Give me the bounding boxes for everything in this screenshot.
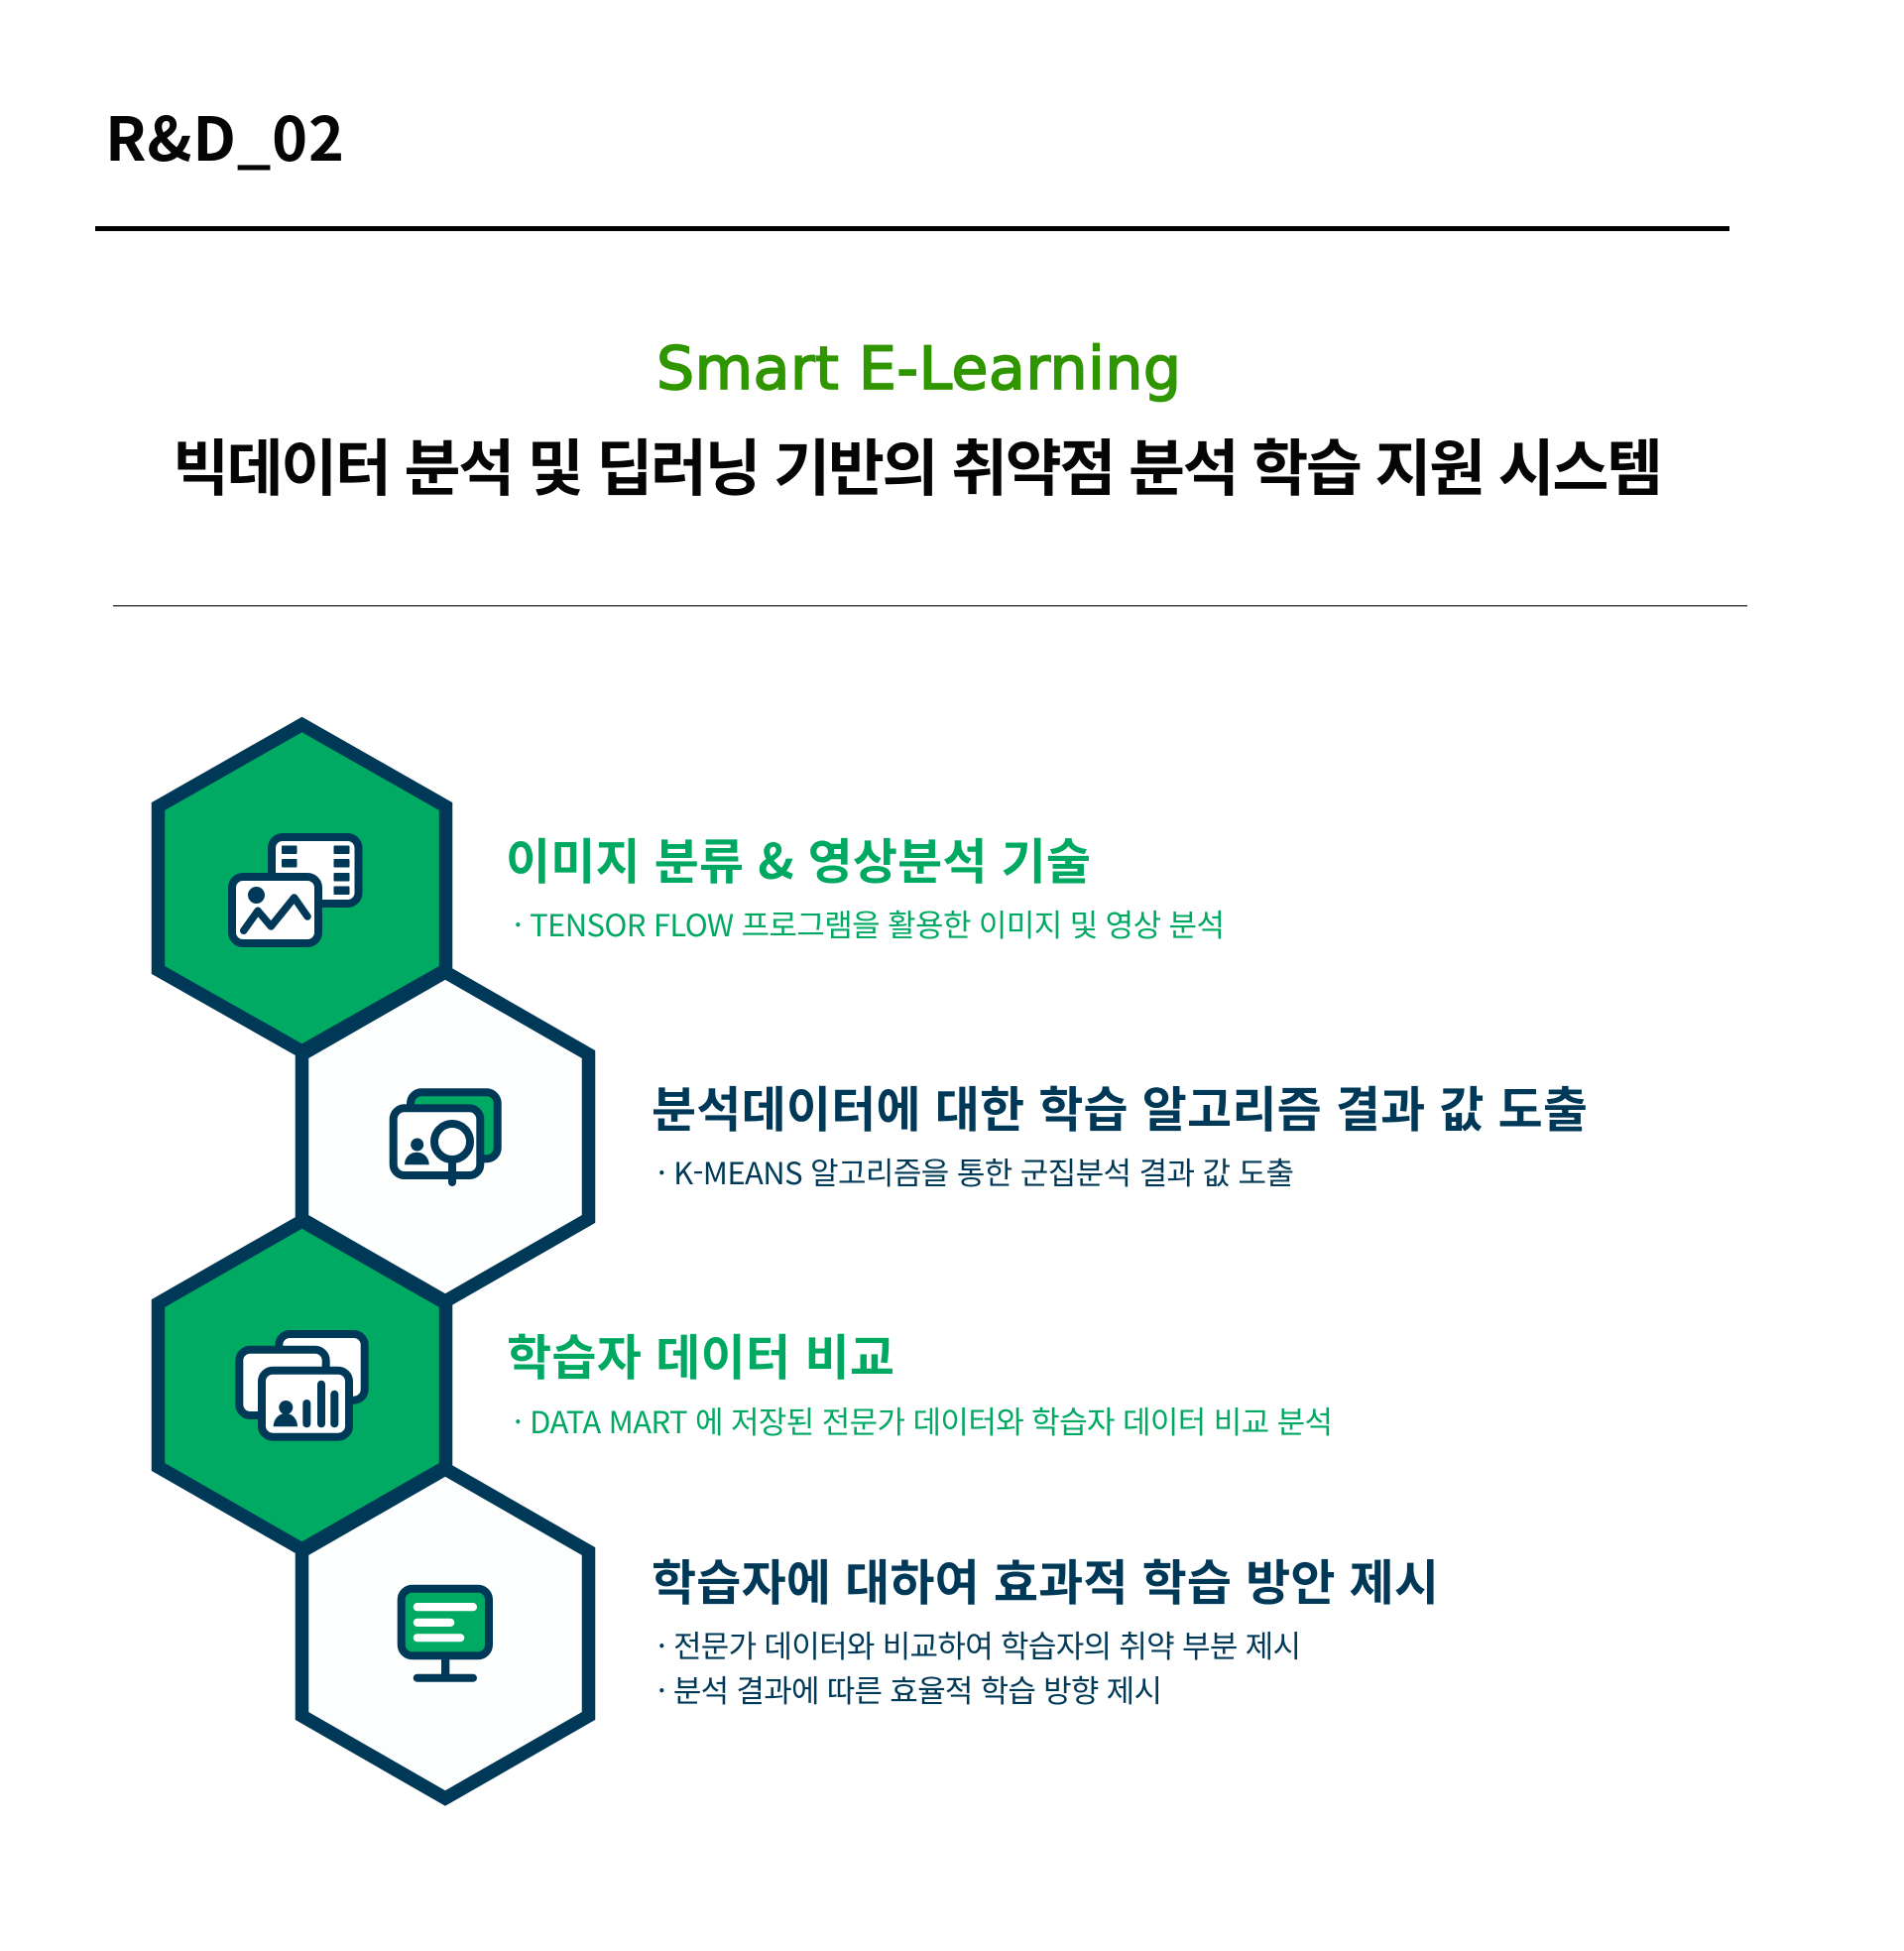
hexagon 2: white: [301, 972, 589, 1301]
section 4 heading: 학습자에 대하여 효과적 학습 방안 제시: [652, 1544, 1439, 1615]
title: system name: 빅데이터 분석 및 딥러닝 기반의 취약점 분석 학습 지원 시스템: [173, 419, 1663, 508]
section 1 heading: 이미지 분류 & 영상분석 기술: [506, 823, 1091, 894]
icon: stacked cards with bar chart: [239, 1334, 365, 1437]
subtitle: Smart E-Learning: Smart E-Learning: [656, 334, 1181, 404]
hexagon 3: green: [159, 1221, 446, 1549]
hexagon 1: green: [159, 724, 446, 1051]
divider rule: [113, 605, 1747, 607]
icon: monitor with text lines: [402, 1589, 489, 1682]
icon: profile cards with magnifier: [394, 1092, 498, 1182]
page label: R&D_02: R&D_02: [105, 90, 344, 179]
section 2 description: · K-MEANS 알고리즘을 통한 군집분석 결과 값 도출: [657, 1149, 1294, 1193]
section 1 description: · TENSOR FLOW 프로그램을 활용한 이미지 및 영상 분석: [514, 901, 1225, 945]
icon: image and film frames: [232, 837, 359, 943]
section 4 description line 2: · 분석 결과에 따른 효율적 학습 방향 제시: [657, 1666, 1162, 1711]
section 2 heading: 분석데이터에 대한 학습 알고리즘 결과 값 도출: [652, 1071, 1588, 1142]
header rule: [95, 226, 1729, 231]
section 3 description: · DATA MART 에 저장된 전문가 데이터와 학습자 데이터 비교 분석: [514, 1398, 1333, 1442]
section 4 description line 1: · 전문가 데이터와 비교하여 학습자의 취약 부분 제시: [657, 1622, 1301, 1666]
section 3 heading: 학습자 데이터 비교: [507, 1319, 894, 1390]
hexagon 4: white: [301, 1469, 589, 1798]
